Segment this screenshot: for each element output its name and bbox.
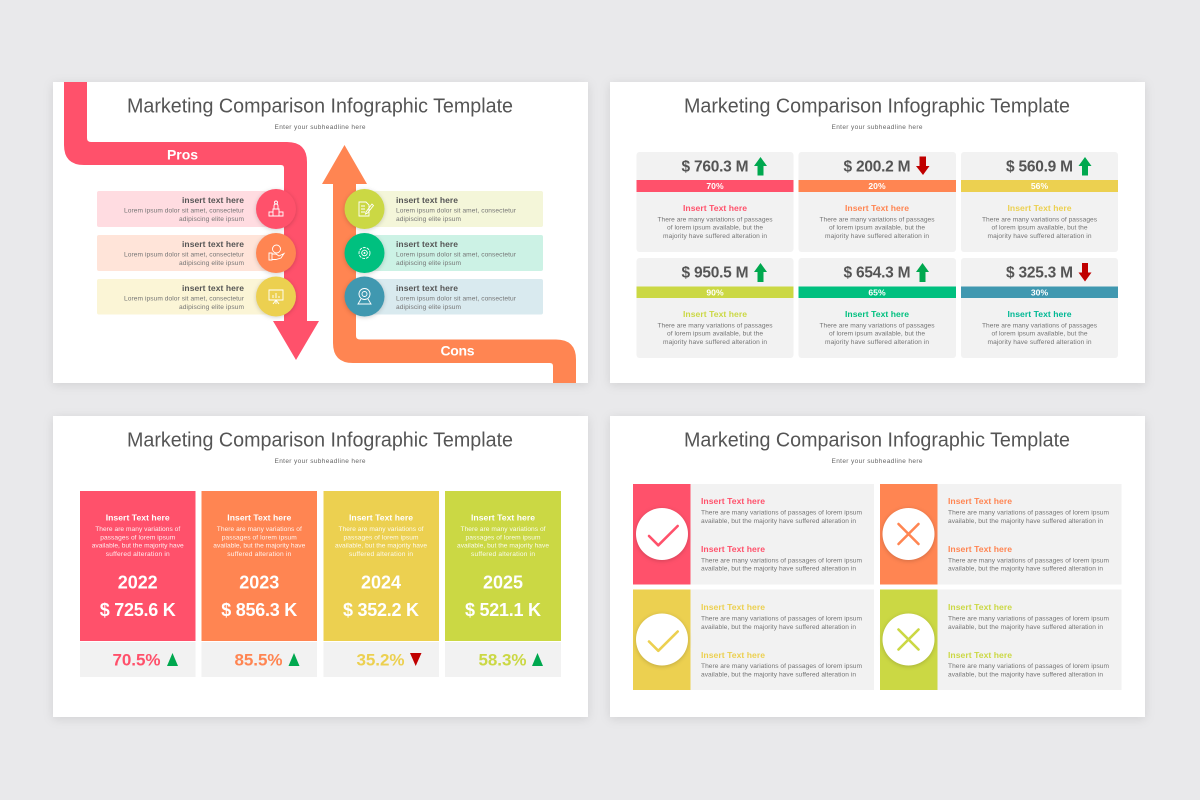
row text: Lorem ipsum dolor sit amet, consectetur [396, 208, 517, 214]
text block 2 [948, 544, 1110, 572]
footer background [202, 642, 317, 677]
card text [658, 322, 773, 346]
column text: available, but the majority have [335, 542, 427, 550]
card background [961, 258, 1118, 358]
text block 2: Insert Text here [948, 544, 1012, 554]
card background [798, 258, 956, 358]
column text [92, 526, 184, 558]
text block 2 [948, 650, 1110, 678]
card text [982, 322, 1098, 346]
card text [820, 322, 935, 346]
text block 1: Insert Text here [701, 496, 765, 506]
text block 1: There are many variations of passages of lorem ipsum [701, 510, 862, 516]
card text: majority have suffered alteration in [825, 339, 929, 346]
arrow: pros [64, 82, 319, 360]
percent bar [961, 180, 1118, 192]
row text: Lorem ipsum dolor sit amet, consectetur [124, 208, 245, 214]
card text: There are many variations of passages [820, 322, 935, 330]
card text [658, 216, 773, 240]
text block 1: There are many variations of passages of lorem ipsum [701, 616, 862, 622]
column: 2022 [80, 491, 196, 677]
card text: of lorem ipsum available, but the [992, 331, 1088, 338]
text block 1 [948, 602, 1110, 631]
column text [335, 526, 427, 558]
card text: of lorem ipsum available, but the [992, 225, 1088, 232]
row text: Lorem ipsum dolor sit amet, consectetur [396, 252, 517, 258]
card heading: Insert Text here [845, 203, 909, 213]
card text: of lorem ipsum available, but the [829, 225, 925, 232]
percent: 85.5% [234, 650, 282, 670]
icon: presentation board [256, 276, 296, 316]
text block 2: available, but the majority have suffered alteration in [701, 672, 856, 678]
icon: target on stand [344, 276, 384, 316]
card text [982, 216, 1098, 240]
card: 560.9 [961, 152, 1118, 252]
text block 2 [701, 544, 862, 572]
card background [636, 258, 794, 358]
text block 2: There are many variations of passages of lorem ipsum [701, 663, 862, 670]
row background [366, 279, 543, 314]
cons row 1 [344, 189, 543, 229]
column text [457, 526, 549, 558]
percent: 20% [868, 181, 886, 191]
column background [324, 491, 439, 641]
column heading: Insert Text here [106, 512, 170, 522]
card text: majority have suffered alteration in [988, 233, 1092, 240]
percent: 70% [706, 181, 724, 191]
icon: coin in hand [256, 233, 296, 273]
row text: insert text here [182, 195, 244, 205]
icon: target [344, 233, 384, 273]
row text: adipiscing elite ipsum [179, 304, 244, 311]
percent: 30% [1031, 287, 1048, 297]
pros row 1 [97, 189, 296, 229]
text block 1: available, but the majority have suffered alteration in [948, 624, 1103, 631]
row background [366, 235, 543, 271]
arrow up [754, 263, 767, 282]
column text: There are many variations of [217, 526, 302, 533]
card text: of lorem ipsum available, but the [667, 225, 763, 232]
column text: There are many variations of [95, 526, 180, 533]
arrow down [916, 156, 930, 175]
amount: $ 521.1 K [465, 600, 541, 620]
icon: cross [882, 614, 934, 666]
panel: yearly columns slide [53, 416, 588, 717]
block: yellow check [633, 590, 874, 690]
card text: There are many variations of passages [982, 216, 1098, 223]
amount: $ 352.2 K [343, 600, 419, 620]
card: 950.5 [636, 258, 794, 358]
column text: available, but the majority have [92, 542, 184, 550]
footer background [80, 642, 196, 677]
column text: suffered alteration in [349, 551, 413, 558]
percent: 65% [868, 287, 886, 297]
card text: majority have suffered alteration in [988, 339, 1092, 346]
panel: pros and cons slide [53, 82, 588, 383]
column text: passages of lorem ipsum [344, 534, 419, 541]
row text: insert text here [396, 195, 458, 205]
arrow down [1078, 263, 1092, 282]
label: cons: Cons [440, 342, 475, 358]
title: Marketing Comparison Infographic Template [684, 430, 1070, 452]
percent: 70.5% [112, 650, 160, 670]
block: orange cross [880, 484, 1122, 584]
cons row 3 [344, 276, 543, 316]
amount: $ 856.3 K [221, 600, 297, 620]
card background [798, 152, 956, 252]
card: 200.2 [798, 152, 956, 252]
column text: There are many variations of [338, 526, 424, 533]
title: Marketing Comparison Infographic Template [127, 96, 513, 118]
arrow up [754, 157, 767, 176]
text background [690, 484, 874, 584]
footer background [324, 642, 439, 677]
slide background [610, 416, 1145, 717]
row background [97, 191, 275, 227]
column background [202, 491, 317, 641]
column text: There are many variations of [460, 526, 546, 533]
card heading: Insert Text here [683, 203, 747, 213]
column: 2024 [324, 491, 439, 677]
text block 2: available, but the majority have suffered alteration in [948, 672, 1103, 678]
row text: adipiscing elite ipsum [179, 260, 244, 267]
value: $ 950.5 M [682, 265, 748, 282]
text block 1 [701, 496, 862, 525]
card background [961, 152, 1118, 252]
percent: 58.3% [478, 650, 526, 670]
icon: podium [256, 189, 296, 229]
text background [938, 484, 1122, 584]
footer background [445, 642, 561, 677]
year: 2025 [483, 572, 523, 592]
column: 2025 [445, 491, 561, 677]
percent: 90% [706, 287, 724, 297]
percent bar [798, 286, 956, 298]
title: Marketing Comparison Infographic Template [127, 430, 513, 452]
text block 2: There are many variations of passages of lorem ipsum [948, 663, 1110, 670]
triangle up [167, 653, 178, 666]
triangle down [410, 653, 422, 666]
percent bar [961, 286, 1118, 298]
text background [690, 590, 874, 690]
text block 1 [701, 602, 862, 631]
text block 2: There are many variations of passages of lorem ipsum [948, 557, 1110, 564]
value: $ 560.9 M [1006, 159, 1073, 176]
title: Marketing Comparison Infographic Template [684, 96, 1070, 118]
card: 325.3 [961, 258, 1118, 358]
year: 2023 [239, 572, 279, 592]
card text: majority have suffered alteration in [663, 233, 767, 240]
year: 2022 [118, 572, 158, 592]
text block 2: available, but the majority have suffered alteration in [948, 566, 1103, 572]
column text: available, but the majority have [213, 542, 306, 550]
arrow up [916, 263, 929, 282]
text block 1 [948, 496, 1110, 525]
triangle up [288, 653, 300, 666]
percent bar [798, 180, 956, 192]
triangle up [532, 653, 543, 666]
text block 2: Insert Text here [948, 650, 1012, 660]
card heading: Insert Text here [1008, 309, 1072, 319]
column heading: Insert Text here [349, 512, 413, 522]
card text: There are many variations of passages [820, 216, 935, 223]
column text: suffered alteration in [471, 551, 535, 558]
text block 1: Insert Text here [948, 602, 1012, 612]
subtitle: Enter your subheadline here [274, 458, 366, 465]
text block 2: Insert Text here [701, 650, 765, 660]
column: 2023 [202, 491, 317, 677]
percent bar [636, 286, 794, 298]
subtitle: Enter your subheadline here [274, 124, 366, 131]
column background [445, 491, 561, 641]
row text [396, 195, 517, 223]
slide background [53, 82, 588, 383]
row background [97, 279, 275, 314]
text block 2: available, but the majority have suffered alteration in [701, 566, 856, 572]
row background [97, 235, 275, 271]
value: $ 200.2 M [844, 159, 910, 176]
row text [124, 283, 245, 311]
arrow up [1078, 157, 1092, 176]
card text [820, 216, 935, 240]
icon: check [636, 508, 688, 560]
column text: passages of lorem ipsum [466, 534, 541, 541]
row text: adipiscing elite ipsum [396, 304, 462, 311]
colour tab [880, 590, 938, 690]
pros row 3 [97, 276, 296, 316]
colour tab [633, 484, 690, 584]
subtitle: Enter your subheadline here [832, 458, 923, 465]
panel: key figures slide [610, 82, 1145, 383]
card text: There are many variations of passages [658, 322, 773, 330]
value: $ 325.3 M [1006, 265, 1073, 282]
row background [366, 191, 543, 227]
icon: notes and pen [344, 189, 384, 229]
block: lime cross [880, 590, 1122, 690]
year: 2024 [361, 572, 401, 592]
column heading: Insert Text here [227, 512, 292, 522]
icon: cross [882, 508, 934, 560]
value: $ 654.3 M [844, 265, 910, 282]
row text: Lorem ipsum dolor sit amet, consectetur [396, 296, 517, 302]
label: pros: Pros [167, 146, 198, 162]
pros row 2 [97, 233, 296, 273]
text block 1: Insert Text here [948, 496, 1012, 506]
text block 1: available, but the majority have suffered alteration in [701, 624, 856, 631]
column text: available, but the majority have [457, 542, 549, 550]
column text: suffered alteration in [106, 551, 170, 558]
colour tab [880, 484, 938, 584]
row text: Lorem ipsum dolor sit amet, consectetur [124, 296, 245, 302]
text block 2 [701, 650, 862, 678]
block: red check [633, 484, 874, 584]
text background [938, 590, 1122, 690]
percent: 56% [1031, 181, 1048, 191]
column text [213, 526, 306, 558]
colour tab [633, 590, 690, 690]
card heading: Insert Text here [845, 309, 909, 319]
column text: suffered alteration in [227, 551, 292, 558]
icon: check [636, 614, 688, 666]
text block 1: available, but the majority have suffered alteration in [948, 518, 1103, 525]
percent: 35.2% [356, 650, 404, 670]
value: $ 760.3 M [682, 159, 748, 176]
text block 2: There are many variations of passages of lorem ipsum [701, 557, 862, 564]
text block 1: There are many variations of passages of lorem ipsum [948, 616, 1110, 622]
row text: insert text here [396, 283, 458, 293]
slide background [53, 416, 588, 717]
row text [124, 239, 245, 267]
text block 1: There are many variations of passages of lorem ipsum [948, 510, 1110, 516]
text block 2: Insert Text here [701, 544, 765, 554]
column heading: Insert Text here [471, 512, 535, 522]
row text [124, 195, 245, 223]
card text: majority have suffered alteration in [663, 339, 767, 346]
card: 760.3 [636, 152, 794, 252]
row text [396, 283, 517, 311]
row text: insert text here [182, 283, 244, 293]
slide background [610, 82, 1145, 383]
cons row 2 [344, 233, 543, 273]
column text: passages of lorem ipsum [222, 534, 297, 541]
card: 654.3 [798, 258, 956, 358]
text block 1: Insert Text here [701, 602, 765, 612]
panel: check and cross slide [610, 416, 1145, 717]
percent bar [636, 180, 794, 192]
column background [80, 491, 196, 641]
row text: insert text here [396, 239, 458, 249]
subtitle: Enter your subheadline here [832, 124, 923, 131]
text block 1: available, but the majority have suffered alteration in [701, 518, 856, 525]
card background [636, 152, 794, 252]
row text: Lorem ipsum dolor sit amet, consectetur [124, 252, 245, 258]
column text: passages of lorem ipsum [100, 534, 176, 541]
card text: of lorem ipsum available, but the [829, 331, 925, 338]
row text: insert text here [182, 239, 244, 249]
arrow: cons [322, 145, 576, 383]
card text: majority have suffered alteration in [825, 233, 929, 240]
amount: $ 725.6 K [100, 600, 176, 620]
card text: There are many variations of passages [982, 322, 1098, 330]
card text: of lorem ipsum available, but the [667, 331, 763, 338]
row text [396, 239, 517, 267]
row text: adipiscing elite ipsum [396, 260, 462, 267]
row text: adipiscing elite ipsum [396, 216, 462, 223]
row text: adipiscing elite ipsum [179, 216, 244, 223]
card heading: Insert Text here [683, 309, 747, 319]
card text: There are many variations of passages [658, 216, 773, 223]
card heading: Insert Text here [1008, 203, 1072, 213]
